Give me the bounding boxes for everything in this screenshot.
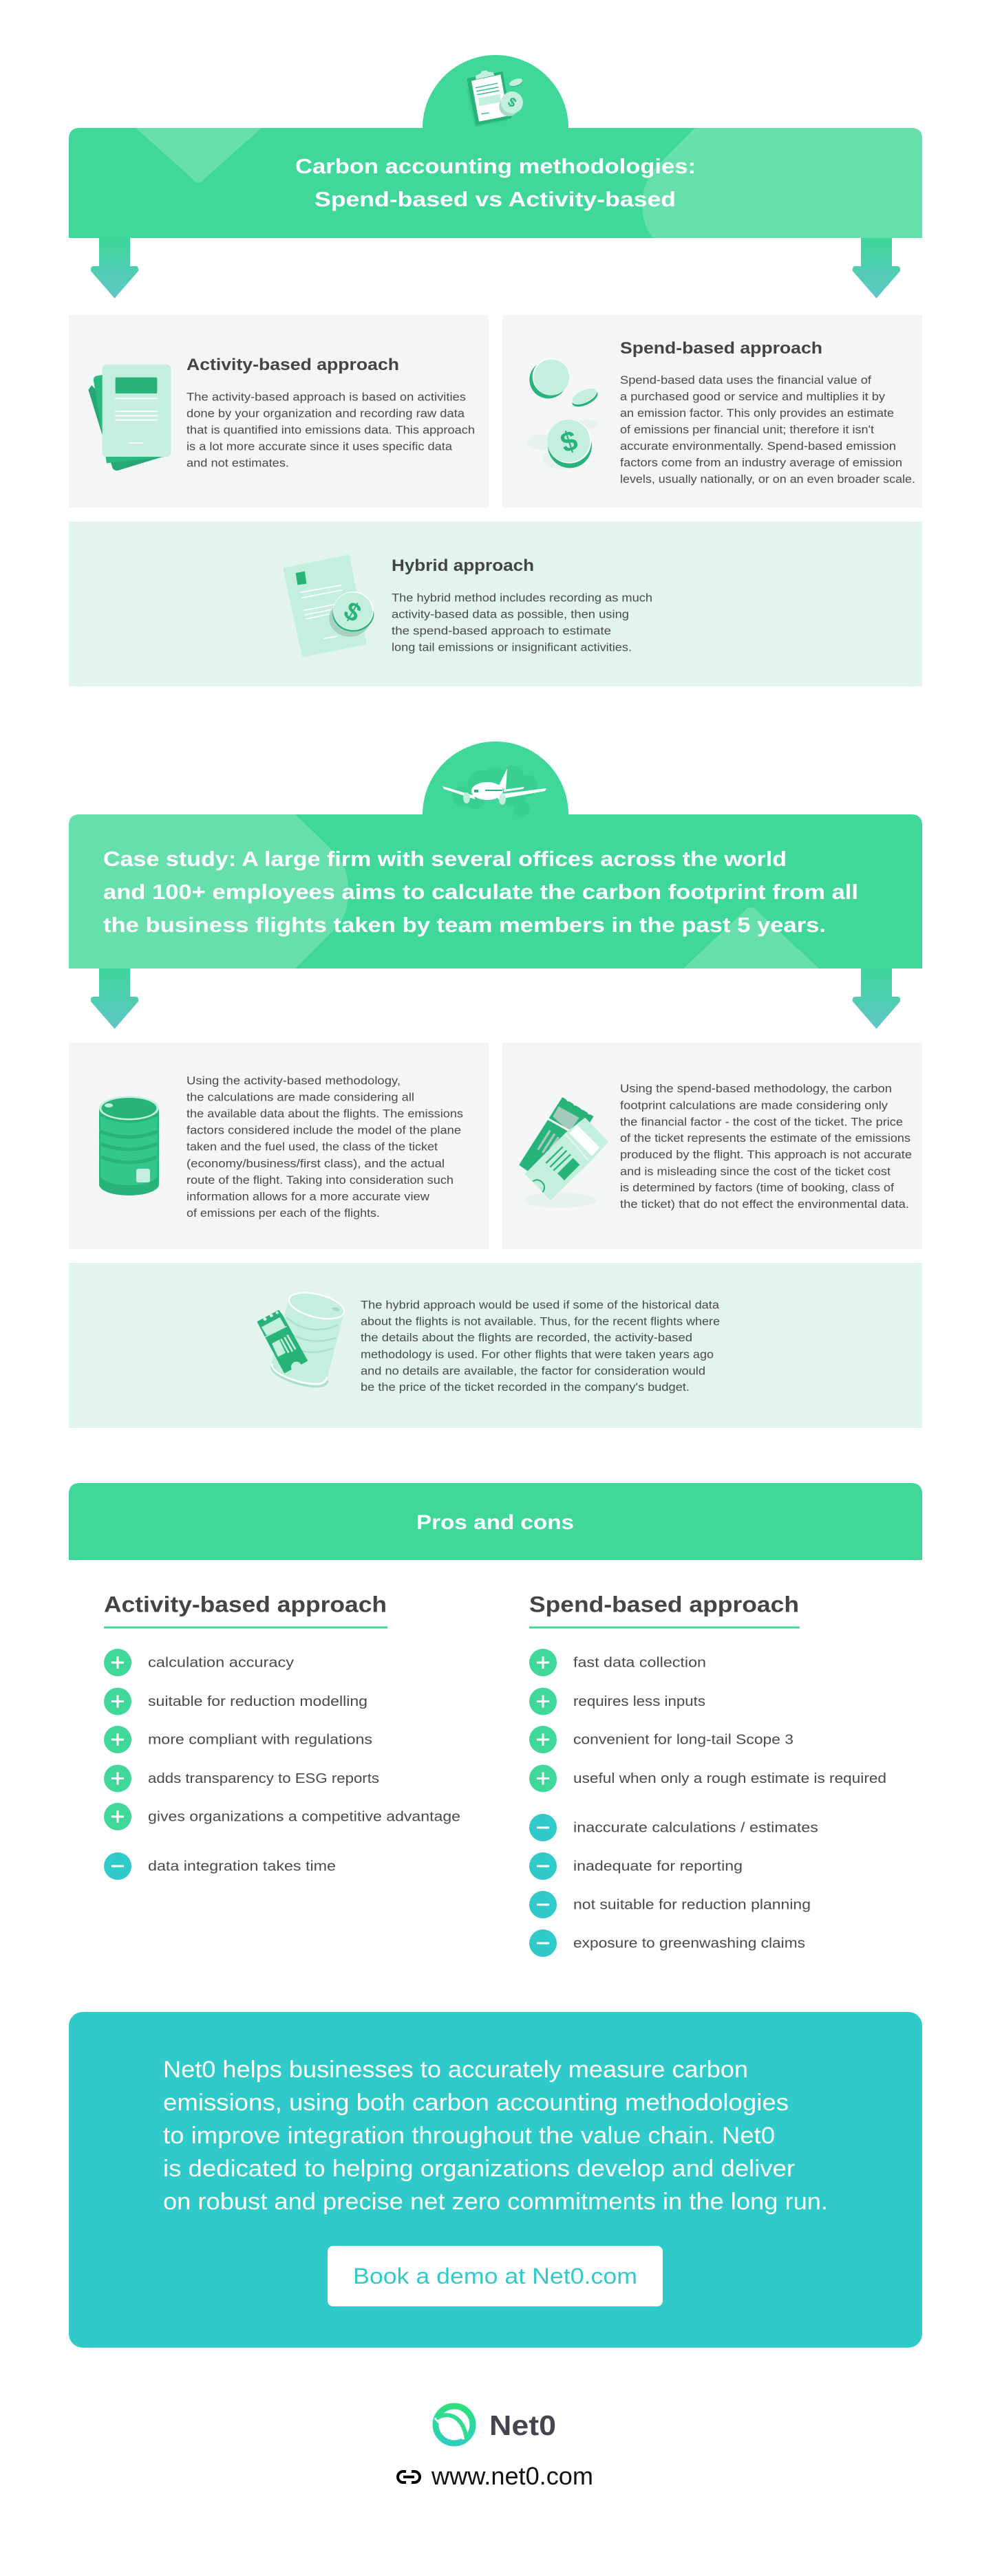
body text [361,1299,720,1394]
case study text: the business flights taken by team members in the past 5 years. [103,913,826,937]
icon: plane tickets [520,1097,608,1208]
pro item: convenient for long-tail Scope 3 [573,1732,793,1747]
title [295,154,696,211]
body text [620,374,915,486]
body text: is determined by factors (time of booking, class of [620,1182,894,1194]
heading underline [529,1626,800,1629]
title: Carbon accounting methodologies: [295,154,696,178]
body text [187,1074,463,1220]
icon: document with coin: $ [339,596,366,628]
body text: factors considered include the model of the plane [187,1125,461,1137]
header band: case study [69,742,922,968]
button: Book a demo at Net0.com [353,2264,637,2288]
pro item: useful when only a rough estimate is required [573,1771,886,1786]
body text: the available data about the flights. The emissions [187,1107,463,1120]
column: spend-based [529,1592,886,1957]
band title: Pros and cons [416,1511,574,1534]
body text: the financial factor - the cost of the ticket. The price [620,1116,903,1128]
body text: the calculations are made considering all [187,1091,414,1103]
panel: spend-based case [502,1043,922,1249]
arrow: left [91,238,138,299]
band decoration: left shape [69,814,348,968]
icon: clipboard and coins [467,70,524,127]
pro item [104,1726,372,1753]
body text: The hybrid approach would be used if some of the historical data [361,1299,720,1311]
body text: footprint calculations are made considering only [620,1099,888,1112]
body text: and is misleading since the cost of the ticket cost [620,1165,891,1178]
band decoration: light wedge [136,128,262,183]
logo: Net0 [436,2406,556,2443]
icon: coins [527,358,600,470]
con item [529,1852,743,1880]
column: activity-based [104,1592,460,1880]
heading underline [104,1626,387,1629]
body text: the details about the flights are recorded, the activity-based [361,1332,692,1344]
band background [69,128,922,238]
pro item: gives organizations a competitive advantage [148,1809,460,1824]
button [328,2246,663,2306]
pro item [104,1688,367,1715]
call to action text: emissions, using both carbon accounting methodologies [163,2090,789,2116]
call to action text [163,2057,828,2215]
panel: hybrid approach [69,521,922,686]
pro item [529,1649,706,1676]
band [69,1483,922,1560]
body text: a purchased good or service and multiplies it by [620,391,886,403]
case study text [103,847,858,937]
body text: produced by the flight. This approach is not accurate [620,1149,912,1161]
body text [187,391,475,469]
pro item [529,1726,793,1753]
url: www.net0.com [431,2462,593,2490]
body text: Spend-based data uses the financial value of [620,374,871,387]
body text: The hybrid method includes recording as much [392,592,652,604]
pro item: adds transparency to ESG reports [148,1771,379,1786]
con item [529,1814,818,1841]
con item: data integration takes time [148,1859,336,1874]
icon: airplane [443,766,546,817]
logo wordmark: Net0 [489,2410,556,2441]
icon: barrel with ticket [257,1288,347,1387]
body text: about the flights is not available. Thus, for the recent flights where [361,1315,720,1328]
body text: is a lot more accurate since it uses specific data [187,440,453,453]
call to action text: Net0 helps businesses to accurately measure carbon [163,2057,748,2083]
con item: exposure to greenwashing claims [573,1936,805,1951]
pro item: calculation accuracy [148,1655,294,1670]
call to action text: is dedicated to helping organizations develop and deliver [163,2156,795,2182]
arrow: left [91,968,138,1029]
dome [423,742,568,814]
band decoration: right shape [642,128,922,238]
pro item [104,1765,379,1793]
con item: inadequate for reporting [573,1859,743,1874]
header band: methodologies [69,55,922,238]
body text: information allows for a more accurate view [187,1191,429,1203]
body text [620,1083,912,1211]
body text: route of the flight. Taking into consideration such [187,1174,454,1187]
panel: activity-based case [69,1043,489,1249]
pro item [104,1649,294,1676]
case study text: Case study: A large firm with several offices across the world [103,847,787,871]
pro item [104,1803,460,1830]
band background [69,814,922,968]
arrow: right [853,238,900,299]
pro item [529,1765,886,1793]
title: Spend-based vs Activity-based [315,187,676,211]
call to action text: on robust and precise net zero commitments in the long run. [163,2189,828,2215]
arrow: right [853,968,900,1029]
icon: stacked documents [88,365,171,470]
body text: methodology is used. For other flights that were taken years ago [361,1348,714,1361]
pro item: more compliant with regulations [148,1732,372,1747]
con item: inaccurate calculations / estimates [573,1820,818,1835]
body text: the ticket) that do not effect the environmental data. [620,1198,909,1211]
call to action text: to improve integration throughout the value chain. Net0 [163,2123,775,2149]
body text: Using the activity-based methodology, [187,1074,401,1087]
con item [104,1852,336,1880]
heading: Hybrid approach [392,556,534,575]
icon: fuel barrel [99,1096,159,1195]
body text: done by your organization and recording raw data [187,407,465,420]
con item [529,1891,811,1918]
body text: long tail emissions or insignificant activities. [392,641,632,653]
panel: call to action [69,2012,922,2348]
icon: link [398,2471,420,2482]
body text: an emission factor. This only provides an estimate [620,407,894,420]
section: pros and cons [69,1483,922,1957]
body text: accurate environmentally. Spend-based emission [620,440,896,453]
body text: of emissions per each of the flights. [187,1207,380,1220]
body text: levels, usually nationally, or on an even broader scale. [620,473,915,486]
panel: spend-based approach [502,315,922,508]
body text: and no details are available, the factor for consideration would [361,1365,705,1377]
body text: (economy/business/first class), and the actual [187,1158,445,1170]
logo mark [436,2406,473,2443]
body text: be the price of the ticket recorded in the company's budget. [361,1381,690,1394]
body text: taken and the fuel used, the class of the ticket [187,1141,438,1154]
body text: of the ticket represents the estimate of the emissions [620,1132,910,1145]
website link [398,2462,593,2490]
pro item: suitable for reduction modelling [148,1694,367,1709]
column heading: Activity-based approach [104,1592,387,1616]
body text: of emissions per financial unit; therefore it isn't [620,424,874,436]
body text [392,592,652,653]
dome [423,55,568,128]
body text: activity-based data as possible, then using [392,608,629,620]
pro item [529,1688,705,1715]
case study text: and 100+ employees aims to calculate the carbon footprint from all [103,880,858,904]
pro item: requires less inputs [573,1694,705,1709]
con item [529,1929,805,1957]
heading: Spend-based approach [620,339,822,358]
heading: Activity-based approach [187,356,399,374]
column heading: Spend-based approach [529,1592,799,1616]
band decoration: triangle [683,907,819,968]
icon: clipboard and coins: $ [505,94,520,111]
body text: and not estimates. [187,457,289,469]
body text: factors come from an industry average of emission [620,457,902,469]
panel: activity-based approach [69,315,489,508]
body text: that is quantified into emissions data. This approach [187,424,475,436]
panel: hybrid case [69,1263,922,1428]
body text: The activity-based approach is based on activities [187,391,466,403]
icon: document with coin [286,557,374,655]
con item: not suitable for reduction planning [573,1897,811,1912]
body text: Using the spend-based methodology, the carbon [620,1083,892,1095]
icon: coins: $ [557,424,582,459]
pro item: fast data collection [573,1655,706,1670]
body text: the spend-based approach to estimate [392,625,611,637]
